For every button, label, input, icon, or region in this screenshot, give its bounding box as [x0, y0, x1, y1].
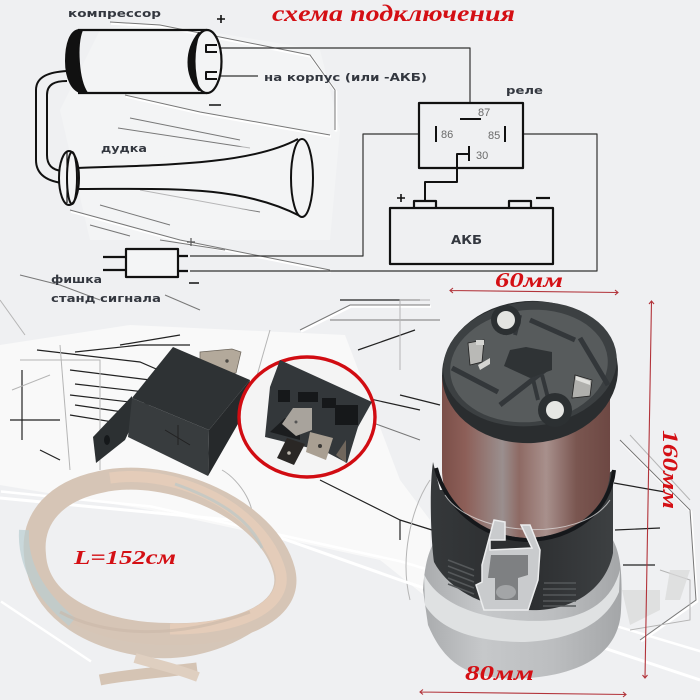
diagram labels: дудка — [101, 142, 147, 155]
diagram labels: фишка — [51, 273, 102, 286]
diagram labels: 87 — [478, 107, 490, 119]
horn — [59, 139, 313, 217]
diagram labels: на корпус (или -АКБ) — [264, 71, 427, 84]
relay photo — [93, 347, 250, 476]
tube length label: L=152см — [73, 547, 176, 569]
dimension: 60 mm — [450, 288, 618, 295]
aluminium base — [423, 535, 622, 679]
diagram labels: компрессор — [68, 7, 161, 20]
diagram labels: реле — [506, 84, 543, 97]
mounting studs — [491, 305, 521, 335]
wiring diagram — [36, 15, 597, 283]
diagram labels: 30 — [476, 150, 488, 162]
air hose — [36, 71, 67, 183]
black ring — [431, 462, 613, 610]
compressor photo — [423, 293, 623, 679]
diagram labels: 85 — [488, 130, 500, 142]
top rim — [437, 295, 623, 449]
air tube coil — [24, 477, 285, 680]
signal connector — [103, 249, 188, 277]
ribs and hub — [452, 315, 608, 405]
wires — [190, 48, 597, 271]
text: 80мм — [465, 661, 534, 685]
dimension: 160 mm — [642, 301, 654, 678]
compressor — [66, 30, 222, 93]
text: 60мм — [495, 268, 563, 292]
diagram labels — [51, 7, 543, 305]
battery — [390, 194, 553, 264]
relay — [419, 103, 523, 200]
vents — [448, 560, 576, 606]
title: схема подключения — [272, 1, 515, 27]
text: 160мм — [658, 430, 683, 509]
dimension: 80 mm — [420, 690, 626, 697]
diagram labels: 86 — [441, 129, 453, 141]
aluminium clip — [476, 520, 540, 610]
cylinder — [442, 375, 610, 538]
relay zoom circle — [239, 357, 375, 477]
diagram labels: станд сигнала — [51, 292, 161, 305]
spade terminals — [468, 340, 484, 365]
diagram labels: АКБ — [451, 233, 482, 247]
